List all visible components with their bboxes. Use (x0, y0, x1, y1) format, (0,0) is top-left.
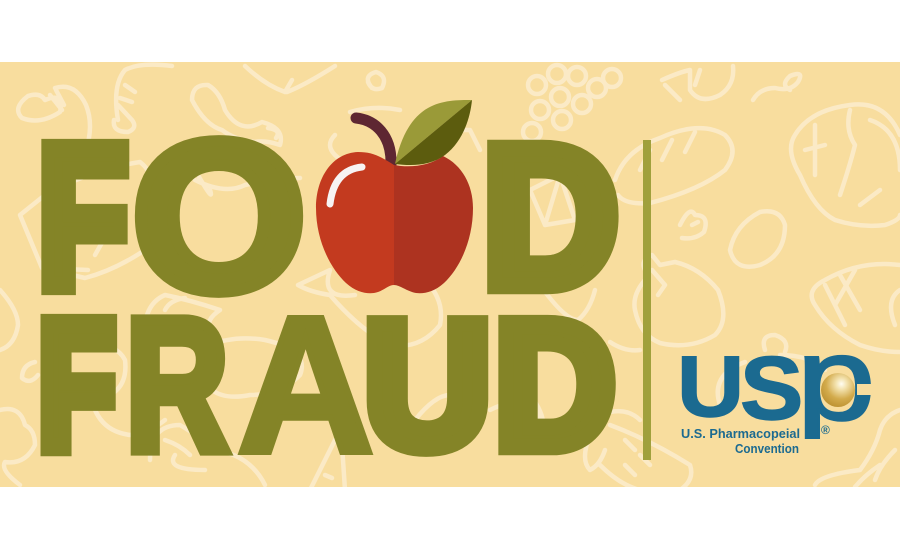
vertical divider (643, 140, 651, 460)
registered mark: ® (821, 423, 830, 437)
title line 2: A: A (237, 276, 374, 494)
title line 2: D: D (495, 284, 615, 485)
icon: apple (316, 100, 473, 293)
title line 1: O: O (132, 98, 306, 336)
infographic banner (0, 62, 900, 487)
logo gold ball (821, 373, 855, 407)
background band (0, 62, 900, 487)
food doodle pattern (0, 65, 900, 490)
leaf upper half (395, 100, 472, 164)
title line 2: F: F (39, 285, 115, 485)
logo gap (857, 384, 873, 395)
logo letter P: p (797, 313, 876, 445)
apple left half (316, 152, 394, 293)
title line 1: F: F (38, 106, 128, 329)
organisation name line 1: U.S. Pharmacopeial (681, 426, 800, 441)
apple highlight (330, 167, 362, 204)
logo letter S: S (740, 337, 803, 438)
title line 2: U: U (364, 284, 491, 485)
title line 2: R: R (125, 279, 229, 491)
apple right half (394, 156, 473, 293)
apple stem (356, 118, 391, 165)
title: food fraud (38, 98, 619, 494)
leaf lower half (395, 100, 472, 165)
organisation name line 2: Convention (735, 441, 799, 456)
title line 1: D: D (482, 106, 619, 329)
logo letter U: U (677, 338, 744, 434)
logo: USP (682, 354, 871, 453)
